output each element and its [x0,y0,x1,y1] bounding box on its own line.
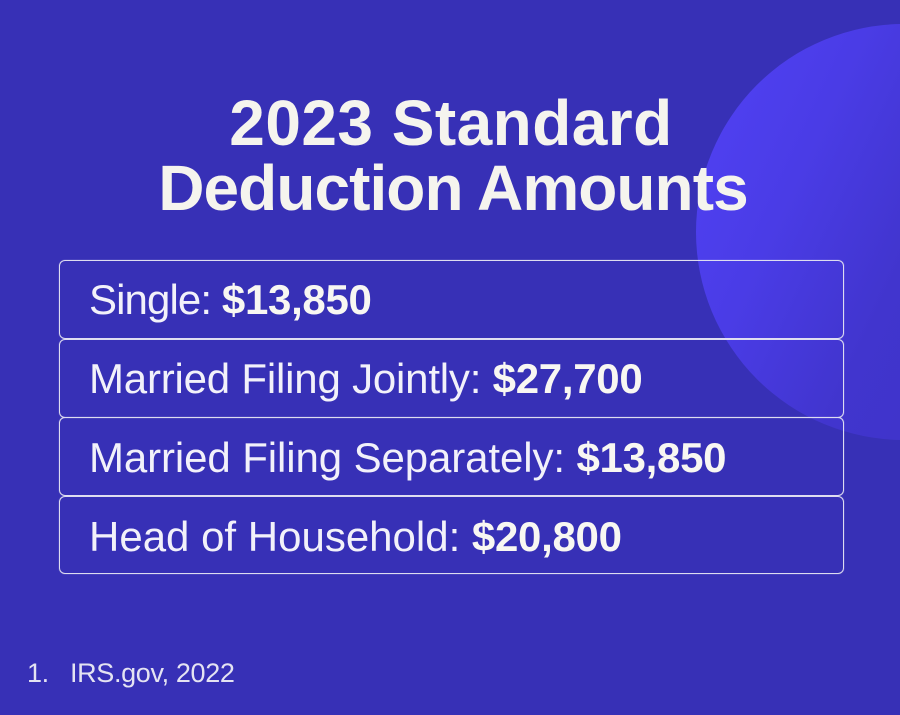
source footnote: IRS.gov, 2022 [70,658,235,688]
title [158,87,748,224]
panel: head of household: Head of Household: $20,800 [89,512,622,560]
source footnote: 1. [27,658,49,688]
panel: married filing separately: Married Filing Separately: $13,850 [89,434,726,480]
title: Deduction Amounts [158,152,748,224]
panel: married filing jointly: Married Filing Jointly: $27,700 [89,354,642,402]
panel: married filing separately [59,417,844,496]
panel: single [59,260,844,339]
panel: single: Single: $13,850 [89,276,372,322]
panel: head of household [59,496,844,574]
panel: married filing jointly [59,339,844,418]
decorative circle [696,24,900,440]
title: 2023 Standard [229,87,673,159]
